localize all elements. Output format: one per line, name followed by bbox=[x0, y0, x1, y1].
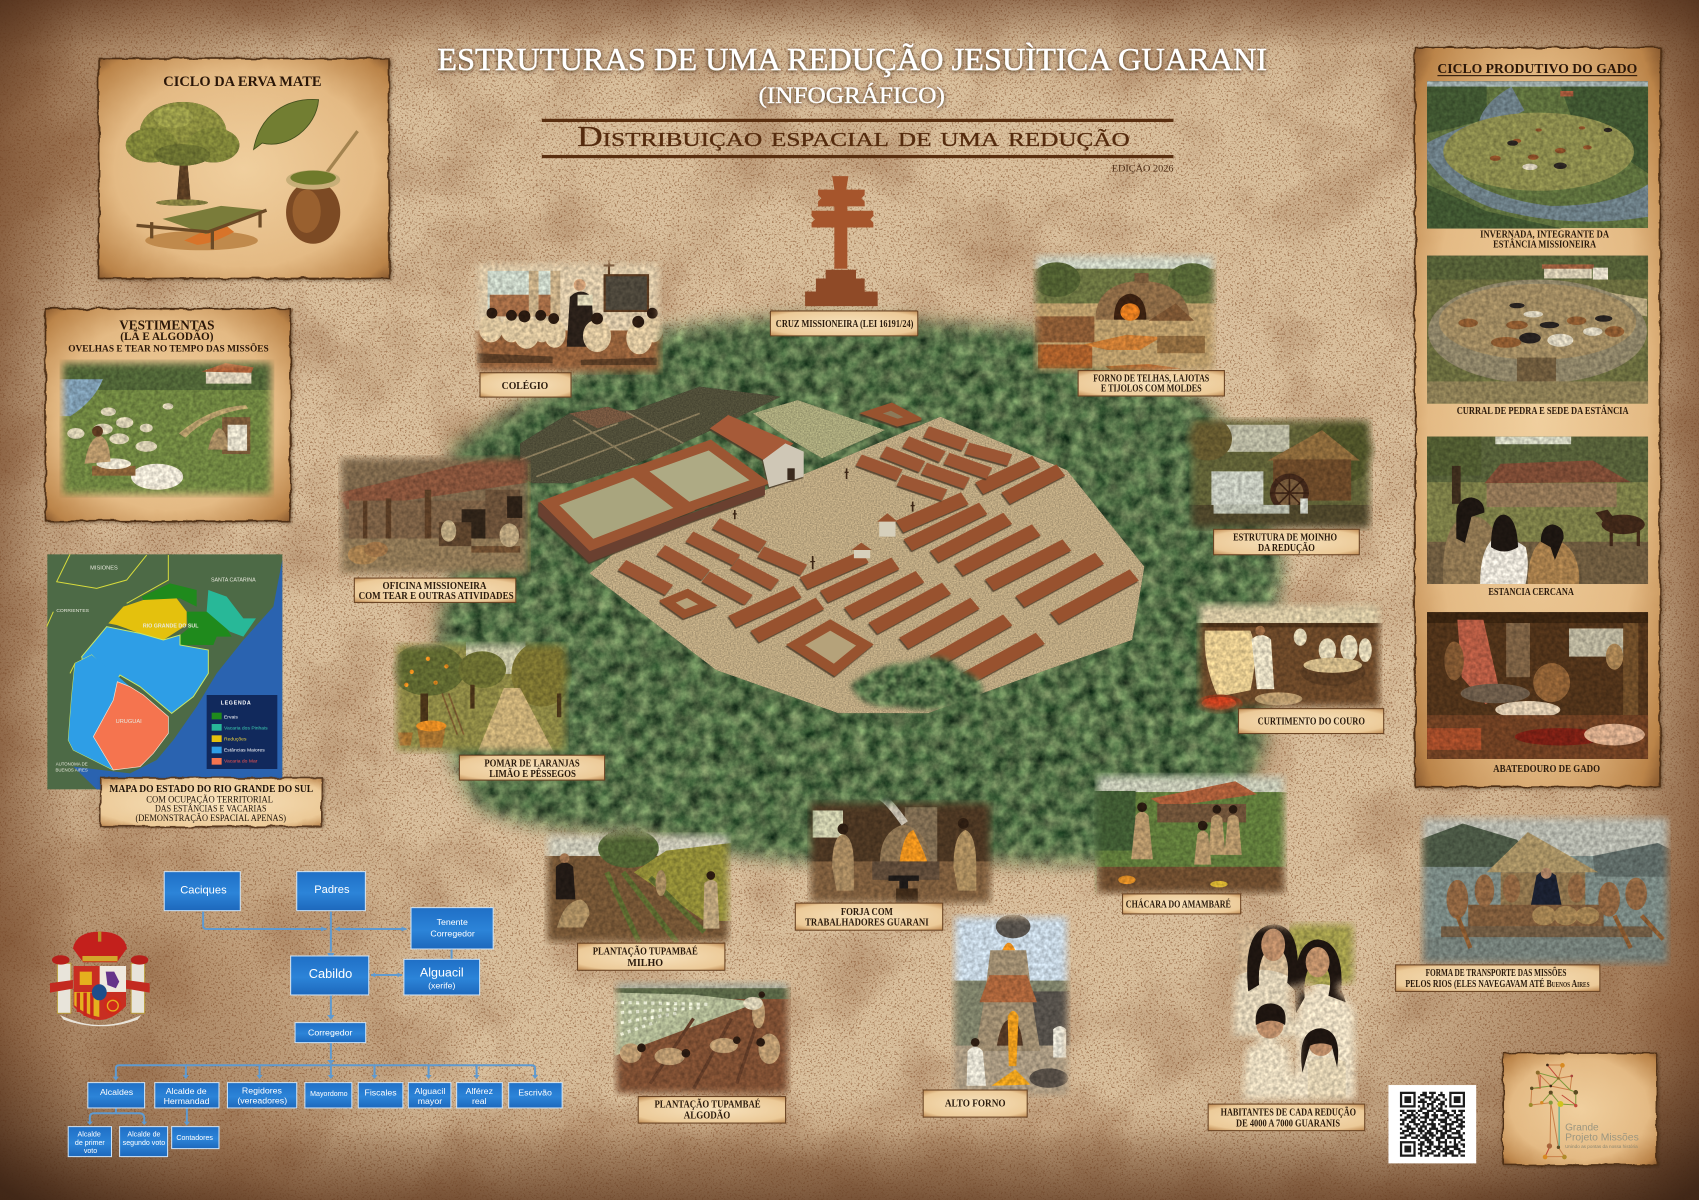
illustration: plantação algodão bbox=[613, 980, 791, 1097]
caption: pomar: POMAR DE LARANJAS bbox=[484, 759, 580, 770]
caption: colégio bbox=[480, 373, 571, 397]
box: corregedor bbox=[295, 1023, 366, 1043]
parchment card bbox=[1415, 48, 1660, 787]
panel: ciclo da erva mate bbox=[99, 59, 389, 278]
caption: mapa: DAS ESTÂNCIAS E VACARIAS bbox=[155, 803, 267, 815]
caption: forja bbox=[795, 903, 943, 930]
wheat backdrop bbox=[1235, 923, 1289, 988]
icon: mate gourd with bombilla bbox=[286, 131, 358, 244]
map labels: RIO GRANDE DO SUL bbox=[143, 624, 199, 630]
map of Rio Grande do Sul bbox=[47, 554, 282, 789]
planted fields bbox=[520, 387, 781, 483]
mission compound bbox=[538, 415, 804, 563]
connectors bbox=[90, 912, 535, 1124]
caption: mapa: MAPA DO ESTADO DO RIO GRANDE DO SUL bbox=[109, 783, 313, 795]
vacaria do mar region bbox=[93, 682, 168, 770]
map labels: URUGUAI bbox=[116, 719, 142, 725]
illustration: alto forno bbox=[951, 913, 1071, 1098]
caption: estancia cercana: ESTANCIA CERCANA bbox=[1488, 587, 1574, 598]
parchment card bbox=[99, 59, 389, 278]
caption: forno bbox=[1078, 371, 1224, 396]
estâncias maiores region bbox=[68, 627, 208, 770]
box: caciques bbox=[164, 872, 240, 911]
caption: chácara bbox=[1123, 894, 1241, 914]
caption: estância missioneira: ESTÂNCIA MISSIONEIRA bbox=[1493, 238, 1597, 250]
dirt plaza and streets bbox=[589, 417, 1144, 713]
caption: transporte bbox=[1396, 965, 1600, 991]
box: fiscales bbox=[358, 1083, 403, 1108]
caption: colégio: COLÉGIO bbox=[502, 380, 548, 392]
icon: spanish coat of arms bbox=[50, 932, 150, 1026]
box: alcalde de segundo voto: segundo voto bbox=[123, 1140, 165, 1147]
box: mayordomo bbox=[305, 1083, 352, 1108]
base scroll bbox=[60, 1015, 141, 1026]
qr modules bbox=[1400, 1093, 1465, 1156]
caption: curtimento: CURTIMENTO DO COURO bbox=[1258, 716, 1365, 727]
logo wordmark line two: Projeto Missões bbox=[1565, 1133, 1639, 1144]
illustration: oficina bbox=[338, 453, 531, 576]
caption: habitantes bbox=[1208, 1104, 1365, 1131]
legend: Estâncias Maiores bbox=[224, 748, 265, 754]
box: escrivão bbox=[509, 1083, 562, 1108]
caption: invernada: INVERNADA, INTEGRANTE DA bbox=[1480, 230, 1610, 241]
missionary cross monument bbox=[805, 176, 878, 306]
box: alguacil mayor: mayor bbox=[418, 1096, 442, 1106]
heading underline bbox=[1437, 75, 1637, 76]
box: alcalde de segundo voto bbox=[120, 1127, 168, 1157]
box: regidores: (vereadores) bbox=[237, 1096, 287, 1106]
box: alguacil bbox=[404, 959, 480, 995]
box: alférez real: real bbox=[472, 1096, 487, 1106]
caption: forno: E TIJOLOS COM MOLDES bbox=[1101, 384, 1202, 395]
box: alférez real bbox=[457, 1083, 502, 1108]
box: alcaldes: Alcaldes bbox=[100, 1087, 134, 1097]
box: tenente corregedor bbox=[411, 908, 493, 949]
small houses bbox=[622, 432, 1010, 600]
caption: milho: PLANTAÇÃO TUPAMBAÉ bbox=[593, 946, 698, 958]
heading: CICLO DA ERVA MATE bbox=[163, 74, 321, 90]
caption: algodão: PLANTAÇÃO TUPAMBAÉ bbox=[654, 1098, 761, 1110]
map labels: AUTONOMA DE bbox=[56, 761, 88, 766]
caption: curtimento bbox=[1238, 709, 1384, 734]
church roof bbox=[710, 415, 794, 463]
map labels: MISIONES bbox=[90, 565, 118, 571]
illustration: chácara do amambaré bbox=[1094, 773, 1287, 896]
panel: vestimentas bbox=[46, 309, 290, 521]
connector arrowheads bbox=[87, 927, 538, 1126]
logo network cross bbox=[1529, 1063, 1578, 1159]
caption: chácara: CHÁCARA DO AMAMBARÉ bbox=[1126, 898, 1231, 910]
box: alguacil mayor bbox=[408, 1083, 451, 1108]
box: regidores: Regidores bbox=[242, 1086, 283, 1096]
caption: transporte: PELOS RIOS (ELES NAVEGAVAM ATÉ Buenos Aires bbox=[1405, 978, 1590, 990]
box: alcalde de primer voto: Alcalde bbox=[78, 1132, 101, 1139]
box: tenente corregedor: Corregedor bbox=[430, 929, 475, 939]
panel: ciclo produtivo do gado bbox=[1415, 48, 1660, 787]
box: padres bbox=[297, 872, 365, 911]
border outlines bbox=[47, 554, 168, 673]
panel: grande projeto missões logo bbox=[1503, 1053, 1657, 1165]
image: invernada bbox=[1427, 81, 1648, 229]
caption: moinho: ESTRUTURA DE MOINHO bbox=[1233, 533, 1337, 544]
box: alcalde de primer voto: de primer bbox=[75, 1140, 105, 1147]
edition: EDIÇÃO 2026 bbox=[1112, 164, 1174, 174]
box: escrivão: Escrivão bbox=[518, 1088, 552, 1098]
caption: moinho bbox=[1214, 529, 1359, 555]
son bbox=[1238, 1039, 1297, 1103]
plaza crosses bbox=[733, 468, 915, 569]
box: regidores bbox=[227, 1083, 297, 1108]
box: alguacil mayor: Alguacil bbox=[415, 1086, 445, 1096]
bushes beside the plaza bbox=[851, 657, 983, 710]
box: fiscales: Fiscales bbox=[364, 1088, 397, 1098]
box: alcalde de hermandad: Hermandad bbox=[164, 1096, 210, 1106]
row houses bbox=[732, 462, 1134, 678]
caption: alto forno: ALTO FORNO bbox=[945, 1098, 1006, 1109]
subheading: (LÃ E ALGODÃO) bbox=[120, 331, 214, 343]
illustration: forno de telhas bbox=[1033, 252, 1217, 374]
caption: forno: FORNO DE TELHAS, LAJOTAS bbox=[1093, 373, 1209, 384]
caption: milho bbox=[578, 943, 725, 970]
qr code bbox=[1388, 1085, 1476, 1163]
chapels bbox=[851, 513, 898, 558]
box: alguacil: (xerife) bbox=[428, 980, 456, 990]
map labels: BUENOS AIRES bbox=[56, 768, 88, 773]
caption: oficina: COM TEAR E OUTRAS ATIVIDADES bbox=[359, 591, 514, 602]
caption: abatedouro: ABATEDOURO DE GADO bbox=[1493, 764, 1600, 775]
lower rule bbox=[542, 155, 1173, 158]
box: cabildo: Cabildo bbox=[309, 966, 352, 981]
foliage backdrop bbox=[1289, 921, 1357, 986]
compound outer walls bbox=[538, 485, 765, 563]
box: contadores: Contadores bbox=[176, 1135, 213, 1142]
organisation chart bbox=[68, 872, 562, 1157]
illustration: moinho bbox=[1184, 417, 1376, 531]
upper rule bbox=[542, 119, 1173, 122]
parchment card bbox=[1503, 1053, 1657, 1165]
church door bbox=[787, 468, 795, 480]
caption: curral: CURRAL DE PEDRA E SEDE DA ESTÂNCIA bbox=[1457, 405, 1629, 417]
caption: forja: FORJA COM bbox=[841, 907, 893, 918]
box: caciques: Caciques bbox=[180, 885, 227, 897]
column caps bbox=[52, 955, 148, 965]
legend: LEGENDA bbox=[221, 700, 251, 706]
map labels bbox=[56, 565, 256, 773]
illustration: pomar de laranjas bbox=[391, 641, 572, 754]
crown bbox=[73, 932, 127, 962]
white tile bbox=[1388, 1085, 1476, 1163]
caption: forja: TRABALHADORES GUARANI bbox=[805, 917, 929, 928]
courtyard houses bbox=[667, 407, 914, 670]
section heading: Distribuiçao espacial de uma redução bbox=[577, 122, 1130, 153]
legend: Vacaria dos Pinhais bbox=[224, 725, 268, 731]
caption: alto forno bbox=[923, 1090, 1027, 1117]
heading: CICLO PRODUTIVO DO GADO bbox=[1437, 61, 1637, 77]
sea bbox=[73, 560, 282, 789]
logo wordmark: Grande bbox=[1565, 1123, 1599, 1134]
box: padres: Padres bbox=[314, 884, 350, 896]
caption: cruz missioneira bbox=[770, 311, 918, 336]
illustration: forja bbox=[807, 796, 994, 906]
map labels: CORRIENTES bbox=[56, 608, 90, 614]
first courtyard bbox=[549, 472, 684, 545]
ervais region bbox=[142, 583, 232, 645]
daughter bbox=[1308, 1058, 1346, 1103]
caption: pomar bbox=[459, 755, 605, 780]
land base bbox=[47, 554, 282, 789]
caption: oficina: OFICINA MISSIONEIRA bbox=[382, 581, 487, 592]
image: abatedouro bbox=[1427, 612, 1648, 759]
reduções region bbox=[108, 598, 187, 640]
second courtyard bbox=[639, 445, 760, 507]
box: mayordomo: Mayordomo bbox=[310, 1091, 348, 1098]
caption: mapa: COM OCUPAÇÃO TERRITORIAL bbox=[146, 793, 273, 805]
box: alguacil: Alguacil bbox=[420, 966, 464, 980]
icon: mate tree bbox=[126, 102, 239, 206]
illustration: transporte fluvial bbox=[1419, 815, 1671, 967]
church facade bbox=[763, 443, 804, 487]
box: alcalde de hermandad: Alcalde de bbox=[166, 1086, 207, 1096]
caption: cruz missioneira: CRUZ MISSIONEIRA (LEI 16191/24) bbox=[776, 319, 913, 330]
parchment card bbox=[46, 309, 290, 521]
box: corregedor: Corregedor bbox=[308, 1027, 353, 1037]
forest around the settlement bbox=[438, 318, 1283, 863]
vacaria dos pinhais region bbox=[207, 590, 256, 637]
map labels: SANTA CATARINA bbox=[211, 578, 256, 584]
image: estância cercana bbox=[1427, 437, 1648, 584]
cross arms and shaft bbox=[812, 176, 873, 269]
subtitle: (INFOGRÁFICO) bbox=[758, 83, 945, 108]
box: alcalde de segundo voto: Alcalde de bbox=[127, 1132, 161, 1139]
title block bbox=[437, 42, 1267, 174]
caption: algodão: ALGODÃO bbox=[684, 1110, 730, 1122]
legend bbox=[207, 695, 277, 769]
stepped base bbox=[805, 270, 878, 306]
box: alcalde de primer voto: voto bbox=[84, 1148, 97, 1155]
box: cabildo bbox=[291, 956, 369, 995]
father bbox=[1229, 970, 1296, 1040]
legend: Reduções bbox=[224, 736, 247, 742]
logo tagline: Unindo as pontas da nossa história bbox=[1565, 1144, 1638, 1150]
shield bbox=[74, 966, 126, 1020]
box: alférez real: Alférez bbox=[466, 1086, 493, 1096]
image: curral de pedra bbox=[1427, 256, 1648, 404]
caption: mapa: (DEMONSTRAÇÃO ESPACIAL APENAS) bbox=[135, 812, 286, 824]
box: alcaldes bbox=[88, 1083, 145, 1108]
illustration: sheep and loom bbox=[60, 360, 274, 497]
caption: habitantes: HABITANTES DE CADA REDUÇÃO bbox=[1221, 1106, 1356, 1118]
legend: Ervais bbox=[224, 714, 238, 720]
icon: drying frame with fire bbox=[137, 206, 267, 250]
illustration: habitantes guaranis bbox=[1229, 921, 1359, 1103]
caption: oficina bbox=[354, 578, 516, 602]
illustration: curtimento do couro bbox=[1195, 601, 1383, 714]
box: alcalde de hermandad bbox=[155, 1083, 219, 1108]
caption: moinho: DA REDUÇÃO bbox=[1258, 542, 1315, 554]
icon: leaf bbox=[254, 99, 319, 150]
settlement plan bbox=[520, 387, 1144, 713]
box: tenente corregedor: Tenente bbox=[437, 917, 468, 927]
caption: algodão bbox=[638, 1097, 786, 1123]
caption: mapa bbox=[101, 778, 322, 827]
supporters columns bbox=[57, 963, 145, 1013]
heading: VESTIMENTAS bbox=[119, 317, 215, 333]
ribbons bbox=[50, 980, 150, 993]
illustration: plantação milho bbox=[544, 829, 731, 945]
caption: milho: MILHO bbox=[627, 958, 663, 969]
mother bbox=[1295, 984, 1359, 1103]
box: contadores bbox=[172, 1127, 219, 1149]
legend: Vacaria do Mar bbox=[224, 759, 258, 765]
caption: pomar: LIMÃO E PÊSSEGOS bbox=[489, 768, 576, 780]
box: alcalde de primer voto bbox=[68, 1127, 111, 1157]
cemetery garden bbox=[753, 400, 885, 458]
illustration: colégio bbox=[475, 260, 663, 375]
main title: ESTRUTURAS DE UMA REDUÇÃO JESUÌTICA GUARANI bbox=[437, 42, 1267, 77]
caption: habitantes: DE 4000 A 7000 GUARANIS bbox=[1236, 1118, 1340, 1129]
caption: transporte: FORMA DE TRANSPORTE DAS MISSÕES bbox=[1426, 967, 1567, 979]
description: OVELHAS E TEAR NO TEMPO DAS MISSÕES bbox=[68, 343, 269, 355]
